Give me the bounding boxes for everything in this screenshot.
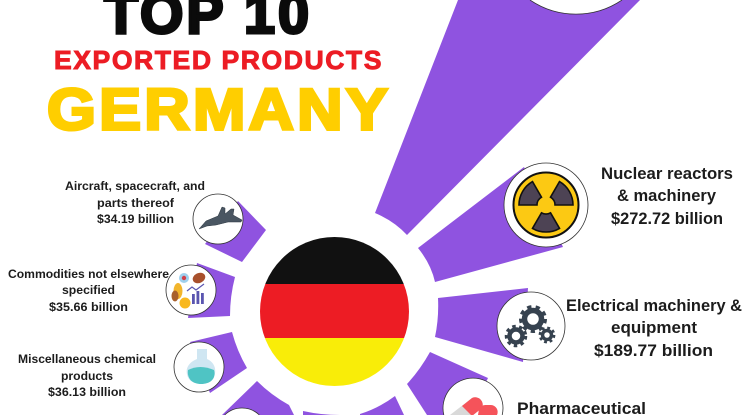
heading: exported products: EXPORTED PRODUCTS (54, 45, 383, 75)
label: nuclear reactors: Nuclear reactors (601, 165, 733, 183)
wedge: pharmaceutical (407, 352, 488, 415)
icon: radiation symbol (504, 163, 588, 247)
wedge: bottom centre (303, 411, 340, 415)
title (47, 0, 391, 142)
label: miscellaneous chemical: $36.13 billion (48, 385, 126, 399)
icon: fighter jet (193, 194, 243, 244)
label: miscellaneous chemical: Miscellaneous chemical (18, 352, 156, 366)
label: aircraft: parts thereof (97, 196, 175, 210)
panel: miscellaneous chemical (18, 332, 247, 399)
wedge: commodities (188, 263, 235, 318)
icon: bottom left circle (225, 408, 259, 415)
wedge: aircraft (205, 201, 266, 262)
panel: aircraft (65, 179, 266, 262)
wedge: bottom left (222, 381, 294, 415)
label: commodities: specified (62, 283, 115, 297)
label: aircraft: $34.19 billion (97, 212, 174, 226)
label: electrical machinery: Electrical machinery & (566, 297, 742, 315)
icon: gears (497, 292, 565, 360)
icon: commodities (166, 265, 216, 315)
panel: top product bar (375, 0, 640, 235)
panel: pharmaceutical (407, 352, 646, 415)
panel: electrical machinery (435, 288, 742, 362)
panel: bottom left product (222, 381, 294, 415)
wedge: miscellaneous chemical (190, 332, 247, 393)
label: miscellaneous chemical: products (61, 369, 113, 383)
wedge: bottom right (360, 396, 404, 415)
icon: top product circle (530, 0, 622, 14)
label: nuclear reactors: $272.72 billion (611, 210, 723, 228)
label: commodities: Commodities not elsewhere (8, 267, 169, 281)
wedge: electrical machinery (435, 288, 528, 362)
label: aircraft: Aircraft, spacecraft, and (65, 179, 205, 193)
icon: flask (174, 342, 224, 392)
label: electrical machinery (566, 297, 742, 360)
icon: pills (443, 378, 503, 415)
label: nuclear reactors (601, 165, 733, 228)
icon: german flag (260, 237, 410, 386)
heading: germany: GERMANY (47, 78, 391, 142)
panel: nuclear reactors (418, 163, 733, 282)
label: commodities: $35.66 billion (49, 300, 128, 314)
wedge: nuclear reactors (418, 167, 563, 282)
label: nuclear reactors: & machinery (617, 187, 717, 205)
label: electrical machinery: $189.77 billion (594, 342, 713, 360)
wedge: top product (375, 0, 640, 235)
label: aircraft (65, 179, 205, 226)
label: miscellaneous chemical (18, 352, 156, 399)
label: commodities (8, 267, 169, 314)
label: electrical machinery: equipment (611, 319, 698, 337)
panel: commodities (8, 263, 235, 318)
